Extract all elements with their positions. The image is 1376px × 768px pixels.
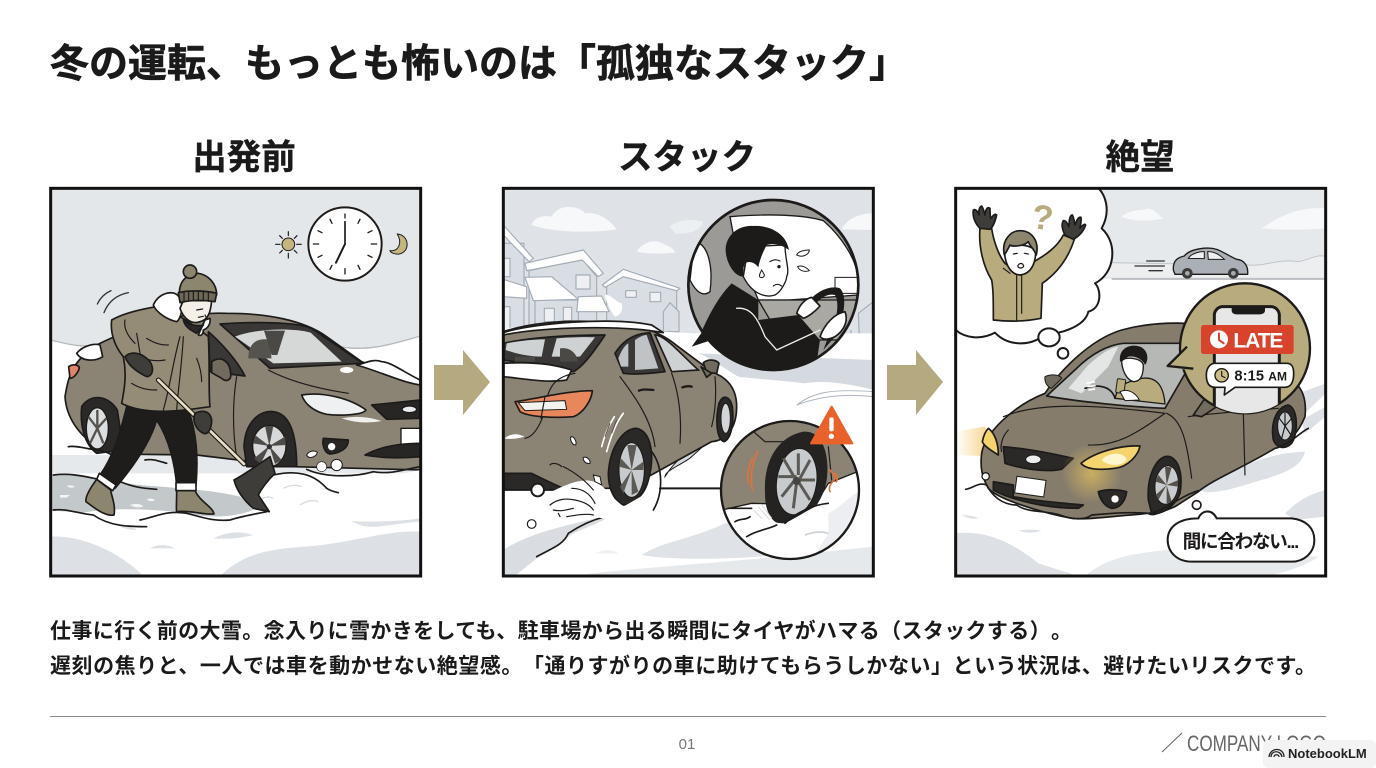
arrow 1	[434, 350, 490, 415]
icon: sun	[276, 232, 301, 258]
person shoveling	[86, 265, 275, 515]
driver	[1085, 346, 1165, 404]
page number: 01	[679, 736, 695, 753]
speech bubble: 間に合わない	[1168, 501, 1314, 562]
title: 冬の運転、もっとも怖いのは「孤独なスタック」	[50, 43, 908, 86]
icon: moon	[390, 234, 407, 254]
thought bubble	[956, 187, 1112, 359]
phone notification bubble	[1167, 283, 1310, 420]
body text: 遅刻の焦りと、一人では車を動かせない絶望感。「通りすがりの車に助けてもらうしかない」という状況は、避けたいリスクです。	[50, 654, 1316, 678]
snow around car	[966, 428, 1308, 519]
magnifier: spinning tire	[718, 420, 862, 560]
car	[65, 313, 423, 470]
thought bubble: ?	[1029, 198, 1056, 239]
headlight beam	[958, 426, 986, 456]
ground	[503, 327, 873, 576]
snow pile	[53, 446, 421, 527]
houses	[504, 226, 872, 334]
magnifier: worried driver	[685, 197, 862, 373]
heading: 絶望: 絶望	[1106, 139, 1174, 177]
phone notification bubble: LATE	[1233, 329, 1283, 352]
body text: 仕事に行く前の大雪。念入りに雪かきをしても、駐車場から出る瞬間にタイヤがハマる（スタックする）。	[50, 619, 1072, 643]
rear car	[503, 321, 737, 505]
NotebookLM badge	[1263, 740, 1376, 768]
stuck car	[981, 323, 1305, 519]
snow spray	[527, 413, 722, 528]
heading: スタック: スタック	[618, 139, 756, 177]
panel: 絶望	[956, 187, 1326, 578]
panel: スタック	[503, 188, 873, 576]
company logo	[1162, 731, 1326, 756]
icon: warning triangle	[811, 407, 852, 443]
speech bubble: 間に合わない: 間に合わない...	[1183, 531, 1299, 552]
phone notification bubble: 8:15 AM	[1234, 369, 1287, 385]
footer rule	[50, 716, 1326, 717]
body text	[50, 619, 1316, 678]
clouds	[532, 207, 873, 254]
icon: clock	[308, 207, 382, 281]
company logo: COMPANY LOGO	[1187, 731, 1326, 756]
passing car	[1135, 248, 1248, 279]
heading: 出発前: 出発前	[192, 139, 296, 177]
arrow 2	[887, 350, 943, 415]
panel: 出発前	[51, 188, 423, 576]
NotebookLM badge: NotebookLM	[1288, 746, 1367, 761]
